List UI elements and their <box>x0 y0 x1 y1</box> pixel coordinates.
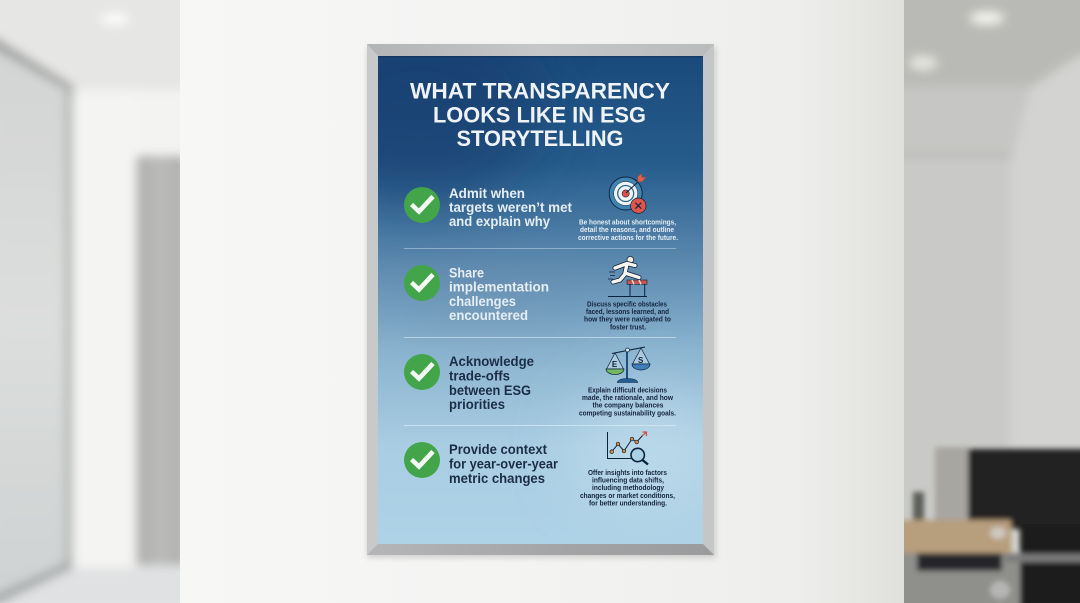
row 2 heading: implementation <box>449 280 549 294</box>
title <box>410 78 670 151</box>
row 1 heading <box>449 186 572 229</box>
poster shadow <box>367 47 716 558</box>
row 1 heading: Admit when <box>449 186 525 201</box>
row 1: admit missed targets <box>404 174 678 242</box>
row 1 description: Be honest about shortcomings, <box>579 219 676 226</box>
row 3 description <box>579 387 676 417</box>
icon: balance scale: E <box>612 360 618 369</box>
title: LOOKS LIKE IN ESG <box>433 102 646 128</box>
row 2 description: faced, lessons learned, and <box>586 309 669 316</box>
row 3 description: the company balances <box>592 403 664 410</box>
row 3 heading: trade-offs <box>449 368 510 383</box>
row 4 description: changes or market conditions, <box>580 493 675 500</box>
icon: target with x <box>609 174 646 213</box>
icon: balance scale <box>606 347 650 382</box>
icon: green check 2 <box>404 265 440 301</box>
title: STORYTELLING <box>456 126 624 151</box>
row 3 description: made, the rationale, and how <box>582 395 674 402</box>
background: left blurred office <box>0 0 190 603</box>
icon: green check 3 <box>404 354 440 390</box>
row 2 description: Discuss specific obstacles <box>587 302 667 308</box>
row 2 heading: encountered <box>449 308 528 323</box>
icon: green check 1 <box>404 187 440 223</box>
row 1 description: corrective actions for the future. <box>578 235 678 242</box>
row 2 heading: challenges <box>449 294 516 309</box>
icon: hurdle jumper <box>608 256 647 296</box>
row 3 heading: Acknowledge <box>449 354 534 369</box>
row 2: implementation challenges <box>404 256 671 331</box>
row 4 heading: metric changes <box>449 471 545 486</box>
row 4 heading: for year-over-year <box>449 456 559 471</box>
row 4 heading <box>449 442 559 486</box>
row 4 description: including methodology <box>592 485 664 492</box>
background: central wall <box>180 0 904 603</box>
row 1 heading: targets weren’t met <box>449 200 572 215</box>
row 3 description: competing sustainability goals. <box>579 410 676 417</box>
row 2 heading <box>449 265 549 323</box>
row 1 description <box>578 219 678 242</box>
row 4: year-over-year context <box>404 432 675 508</box>
icon: balance scale: S <box>638 356 644 365</box>
row 3 description: Explain difficult decisions <box>588 387 667 394</box>
row 3 heading <box>449 354 534 412</box>
icon: green check 4 <box>404 442 440 478</box>
row 4 description: influencing data shifts, <box>592 478 664 484</box>
row 4 heading: Provide context <box>449 442 547 457</box>
row 2 description: how they were navigated to <box>584 317 671 324</box>
row 4 description <box>580 470 675 508</box>
poster frame <box>367 44 714 555</box>
background: right blurred office <box>896 0 1080 603</box>
row 3 heading: between ESG <box>449 383 531 398</box>
row 2 heading: Share <box>449 265 484 280</box>
row 3 heading: priorities <box>449 397 505 412</box>
row 3: ESG trade-offs <box>404 347 676 417</box>
title: WHAT TRANSPARENCY <box>410 78 670 104</box>
row 2 description <box>584 302 671 331</box>
poster panel <box>378 56 703 544</box>
row 4 description: for better understanding. <box>589 500 667 508</box>
row 4 description: Offer insights into factors <box>588 470 667 477</box>
row 2 description: foster trust. <box>610 324 646 331</box>
row 1 description: detail the reasons, and outline <box>580 227 674 234</box>
row 1 heading: and explain why <box>449 214 550 229</box>
icon: line chart with magnifier <box>608 432 648 464</box>
